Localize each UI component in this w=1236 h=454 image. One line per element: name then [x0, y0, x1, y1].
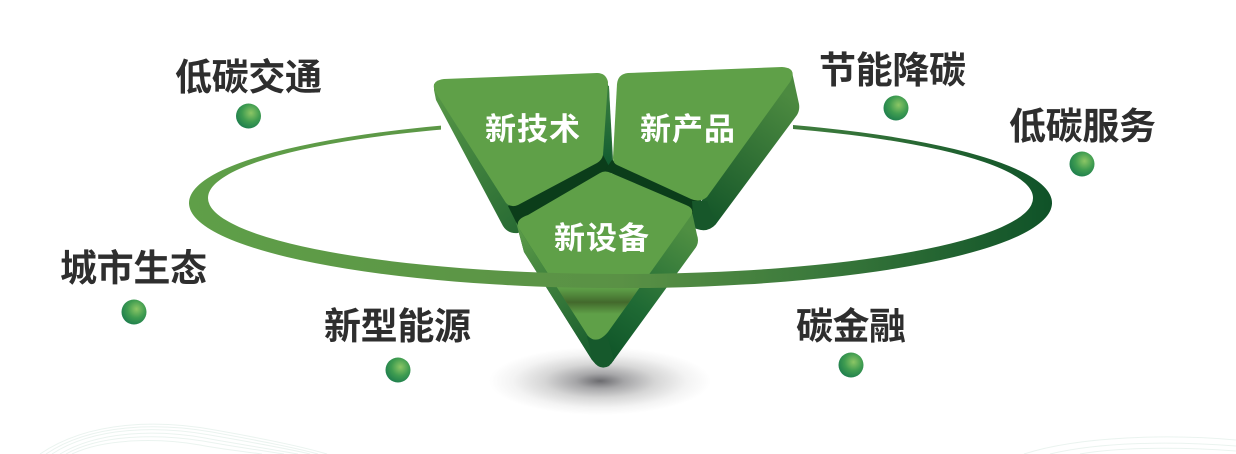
pyramid shadow — [489, 347, 711, 415]
label: 碳金融: 碳金融 — [796, 306, 906, 347]
label: 低碳交通: 低碳交通 — [175, 57, 322, 98]
orbit ring: lower sweep in front of pyramid — [189, 204, 1052, 288]
label: 低碳服务: 低碳服务 — [1009, 106, 1156, 147]
pyramid segment: 新产品 — [605, 67, 799, 230]
dot: 低碳交通 — [236, 104, 261, 128]
label: 新技术: 新技术 — [485, 112, 580, 147]
dot: 节能降碳 — [884, 96, 908, 120]
band shadow on pyramid — [560, 290, 637, 312]
dot: 城市生态 — [122, 300, 146, 324]
background waves — [40, 424, 1236, 454]
dot: 低碳服务 — [1070, 152, 1094, 176]
pyramid segment: 新设备 — [516, 172, 698, 368]
dot: 碳金融 — [838, 352, 864, 378]
dot: 新型能源 — [386, 358, 410, 382]
label: 城市生态: 城市生态 — [60, 248, 207, 289]
orbit ring: back — [189, 125, 1052, 204]
label: 新设备: 新设备 — [554, 221, 649, 256]
label: 节能降碳: 节能降碳 — [819, 50, 966, 91]
pyramid segment: 新技术 — [434, 73, 613, 233]
label: 新产品: 新产品 — [640, 112, 735, 147]
label: 新型能源: 新型能源 — [324, 306, 471, 347]
